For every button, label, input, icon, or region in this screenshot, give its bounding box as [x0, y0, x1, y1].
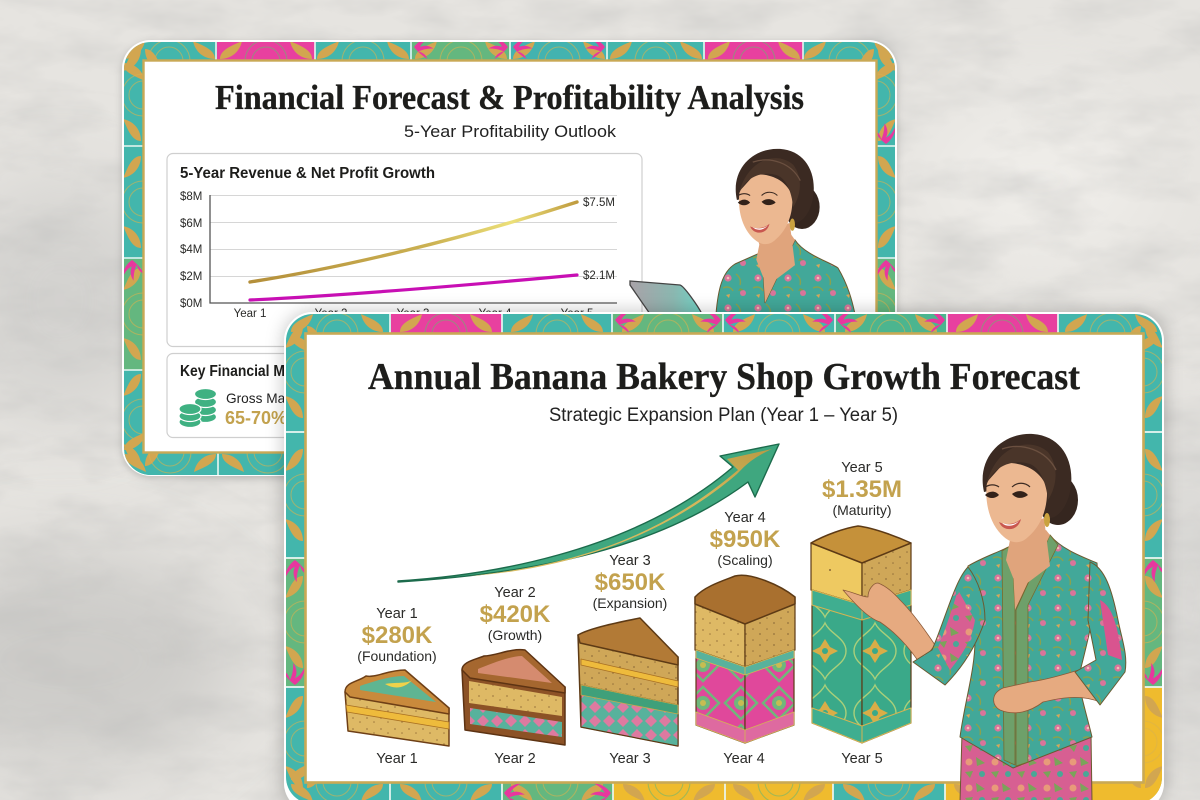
arrow: growth trend: [398, 444, 779, 582]
y axis labels: $2M: [180, 271, 202, 283]
jacket body: [960, 535, 1097, 768]
cake: year 1 slice: [345, 670, 449, 746]
resting sleeve pink panel: [1100, 600, 1122, 660]
year 3 label: Year 3: [609, 553, 651, 569]
end labels: [583, 197, 615, 282]
bottom year labels: Year 2: [494, 751, 536, 767]
year 2 label: (Growth): [488, 627, 542, 643]
year 2 label: $420K: [480, 601, 551, 628]
bottom year labels: Year 4: [723, 751, 765, 767]
card 2 tile border: [286, 314, 1162, 800]
year 2 label: Year 2: [494, 585, 536, 601]
year 5 label: (Maturity): [832, 502, 892, 518]
year 3 label: $650K: [595, 569, 666, 596]
x axis labels: Year 3: [397, 308, 429, 320]
bottom year labels: Year 5: [841, 751, 883, 767]
year 4 label: Year 4: [724, 510, 766, 526]
pointing forearm and hand: [843, 583, 935, 664]
pointing sleeve: [913, 567, 985, 685]
cake: year 3 slice: [578, 618, 678, 746]
head and hair: [983, 434, 1078, 590]
chart heading: 5-Year Revenue & Net Profit Growth: [180, 165, 435, 182]
title: Financial Forecast & Profitability Analysis: [215, 78, 804, 117]
year 4 label: $950K: [710, 526, 781, 553]
sleeve pink floral panel: [938, 590, 975, 670]
resting forearm and hand: [994, 668, 1100, 713]
y axis labels: $0M: [180, 298, 202, 310]
bottom year labels: [376, 751, 883, 767]
year 2 label: [480, 585, 551, 643]
year 1 label: [357, 606, 437, 664]
net profit line: [250, 275, 577, 300]
year 1 label: Year 1: [376, 606, 418, 622]
kebaya: [716, 240, 855, 314]
resting sleeve: [1075, 562, 1126, 705]
cake: year 4 block: [695, 575, 795, 743]
gross margin metric: Gross Margin: [226, 390, 308, 406]
main title: Annual Banana Bakery Shop Growth Forecast: [368, 356, 1080, 398]
year 1 label: (Foundation): [357, 648, 437, 664]
cake: year 2 slice: [462, 650, 565, 745]
neck: [1012, 530, 1050, 610]
year 3 label: (Expansion): [593, 595, 667, 611]
bottom year labels: Year 3: [609, 751, 651, 767]
card 1 tile border: [124, 42, 895, 475]
panel: key financial metrics: [167, 354, 567, 438]
bottom year labels: Year 1: [376, 751, 418, 767]
illustration: presenter woman in kebaya: [843, 434, 1126, 800]
subtitle: 5-Year Profitability Outlook: [404, 122, 617, 141]
gross margin metric: [225, 390, 308, 428]
skirt: [960, 733, 1092, 800]
y axis labels: $4M: [180, 244, 202, 256]
y axis labels: $6M: [180, 218, 202, 230]
illustration: woman with tablet: [630, 149, 855, 314]
year 5 label: [822, 460, 902, 518]
x axis labels: Year 1: [234, 308, 266, 320]
neck and collar: [755, 226, 795, 303]
y axis labels: [180, 191, 202, 310]
end labels: $2.1M: [583, 270, 615, 282]
end labels: $7.5M: [583, 197, 615, 209]
x axis labels: Year 2: [315, 308, 347, 320]
x axis labels: [234, 308, 593, 320]
main subtitle: Strategic Expansion Plan (Year 1 – Year 5): [549, 405, 898, 426]
collar trim: [1002, 535, 1058, 766]
year 4 label: (Scaling): [717, 552, 773, 568]
cake: year 5 block: [811, 526, 911, 743]
x axis labels: Year 4: [479, 308, 512, 320]
panel: revenue chart: [167, 154, 642, 346]
gridlines and axes: [210, 195, 617, 303]
y axis labels: $8M: [180, 191, 202, 203]
gross margin metric: 65-70%: [225, 408, 287, 428]
tablet: [630, 281, 702, 314]
head: [736, 149, 820, 286]
year 3 label: [593, 553, 667, 611]
icon: coin stacks: [179, 388, 216, 428]
year 1 label: $280K: [362, 622, 433, 649]
metrics heading: Key Financial Metrics: [180, 363, 322, 380]
year 5 label: $1.35M: [822, 476, 902, 503]
year 5 label: Year 5: [841, 460, 883, 476]
x axis labels: Year 5: [561, 308, 593, 320]
year 4 label: [710, 510, 781, 568]
panel: annual growth forecast card: [259, 288, 1189, 800]
revenue line: [250, 202, 577, 282]
panel: financial forecast card: [119, 39, 900, 481]
